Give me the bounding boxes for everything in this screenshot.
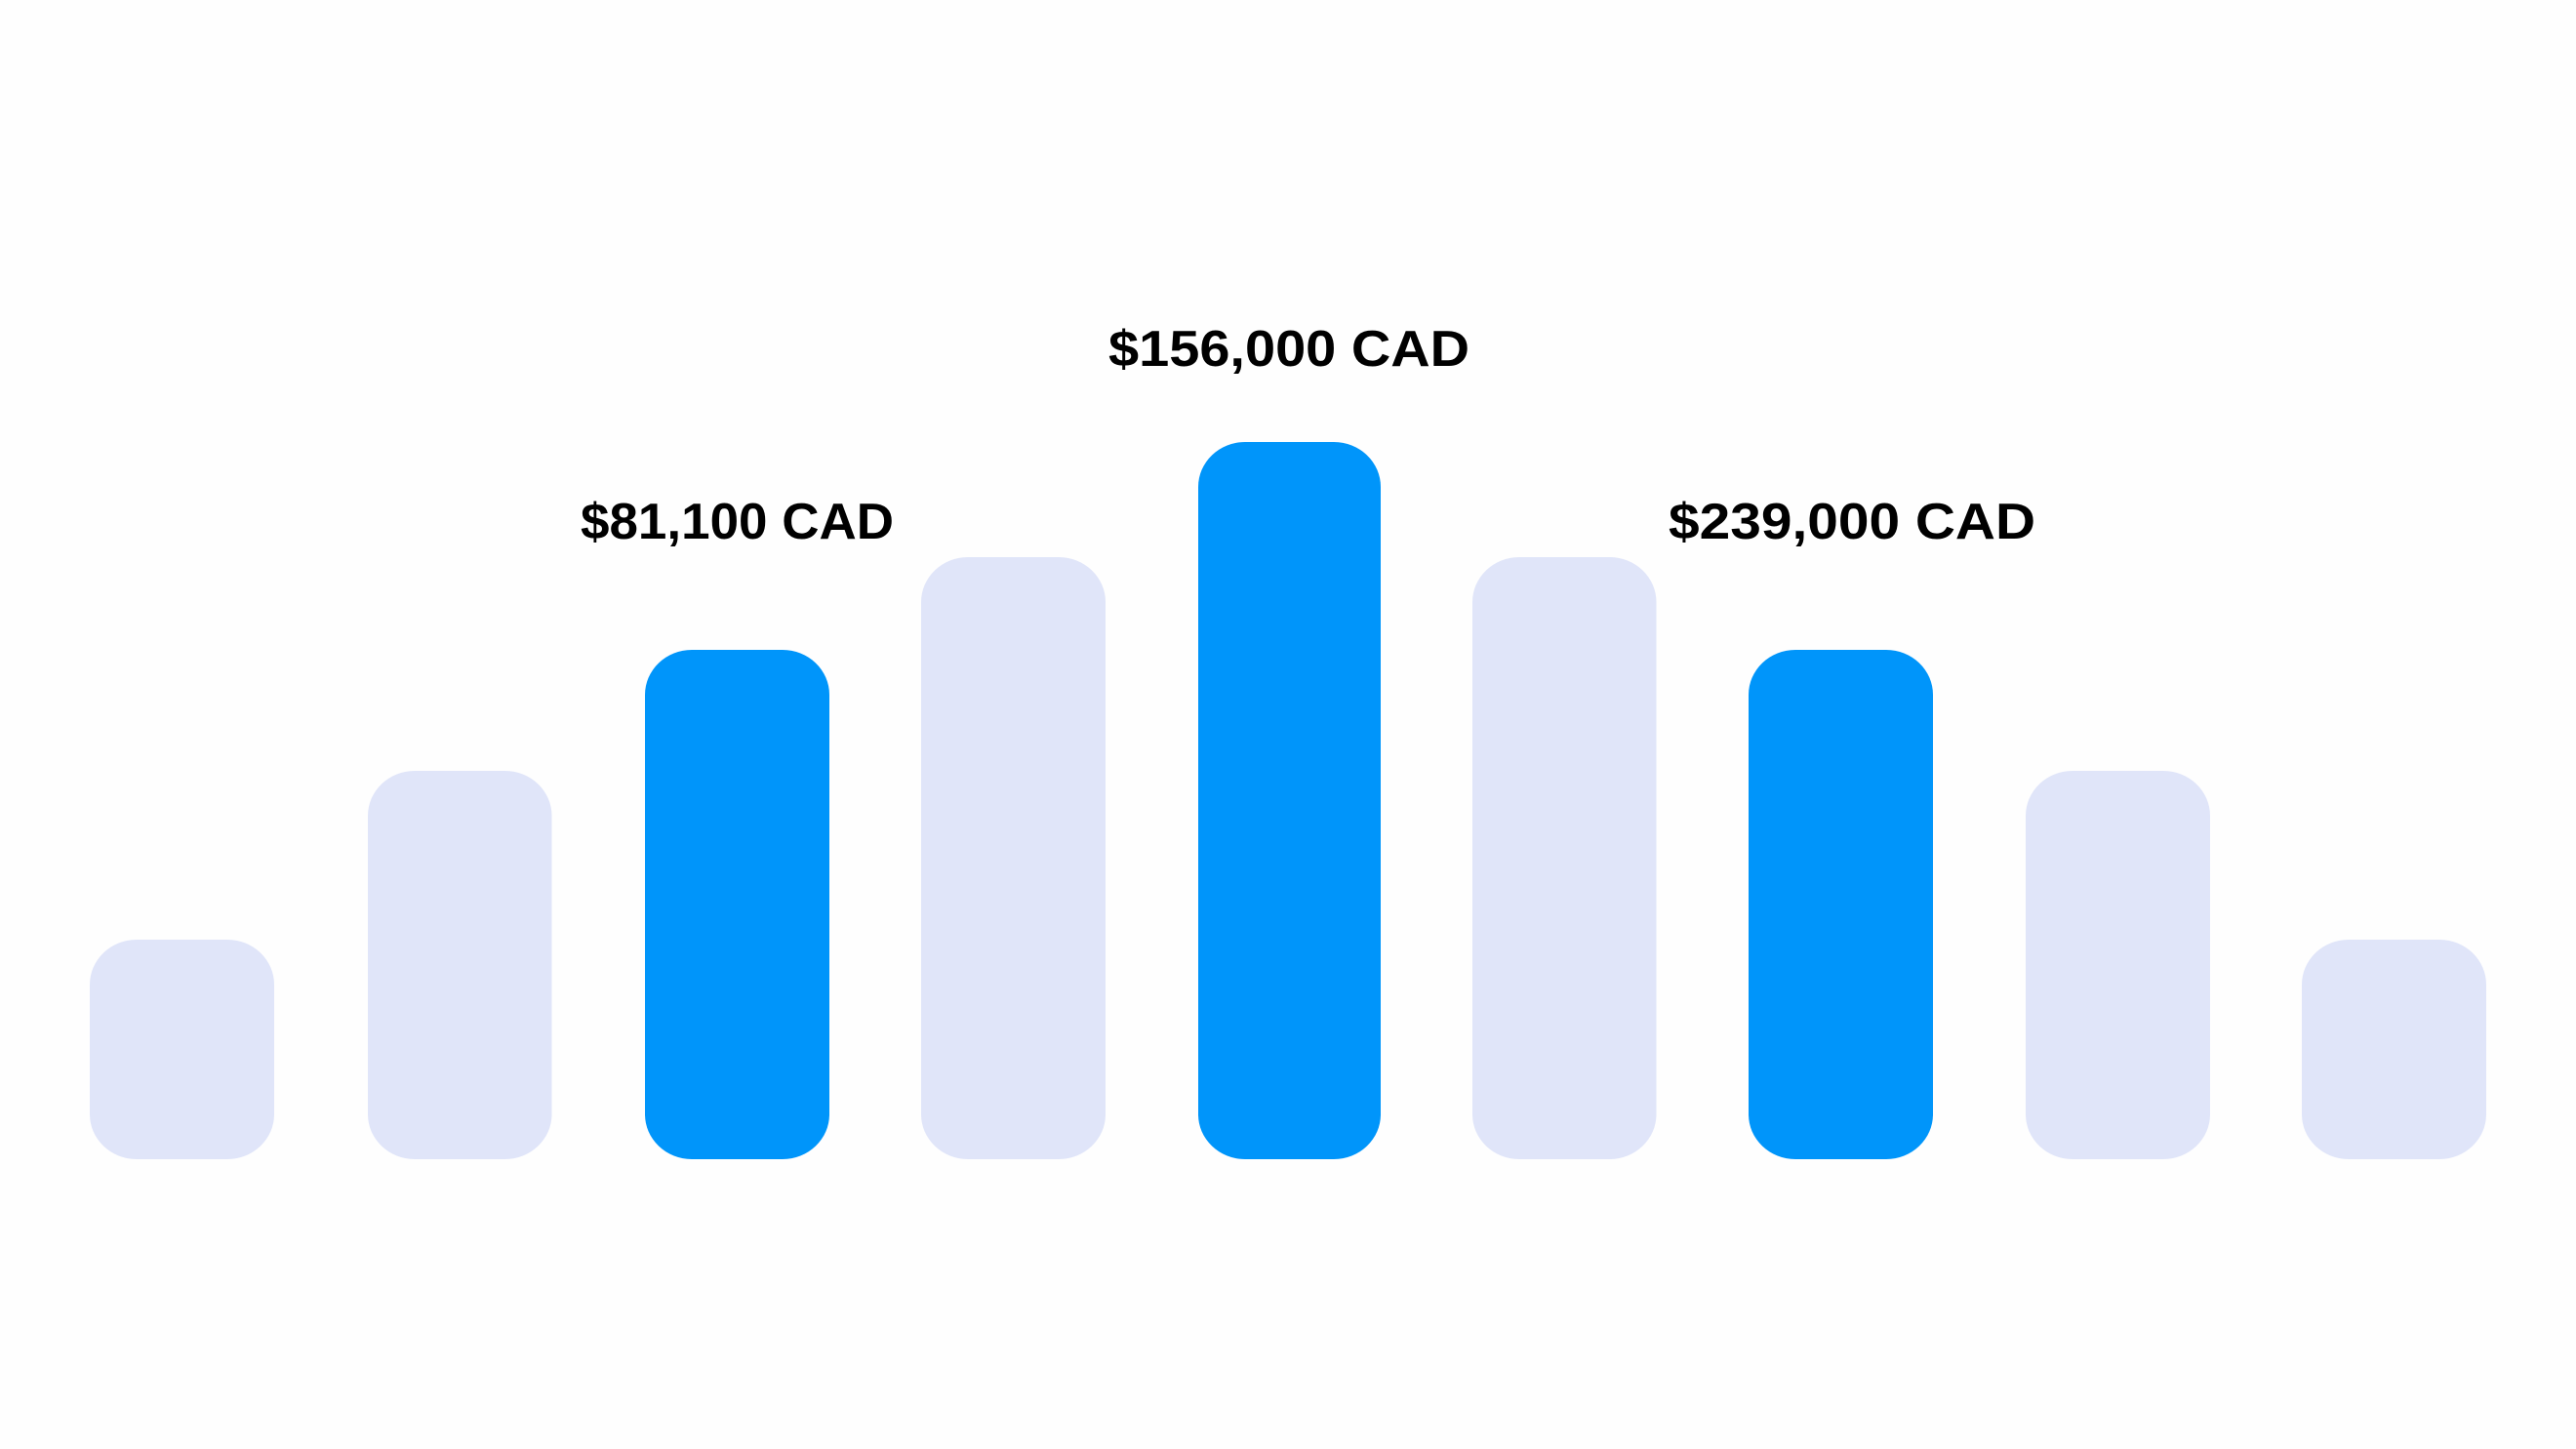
- label: middle value: $156,000 CAD: [1108, 321, 1469, 378]
- bar 8: [2026, 771, 2210, 1159]
- bar 1: [90, 940, 274, 1159]
- bar 2: [368, 771, 552, 1159]
- label: low value: $81,100 CAD: [581, 494, 894, 550]
- bar 4: [921, 557, 1106, 1159]
- bar 5: highlighted: [1198, 442, 1381, 1159]
- label: high value: $239,000 CAD: [1669, 494, 2035, 550]
- bar 9: [2302, 940, 2486, 1159]
- bar 6: [1472, 557, 1657, 1159]
- bar 3: highlighted: [645, 650, 829, 1159]
- bar 7: highlighted: [1749, 650, 1933, 1159]
